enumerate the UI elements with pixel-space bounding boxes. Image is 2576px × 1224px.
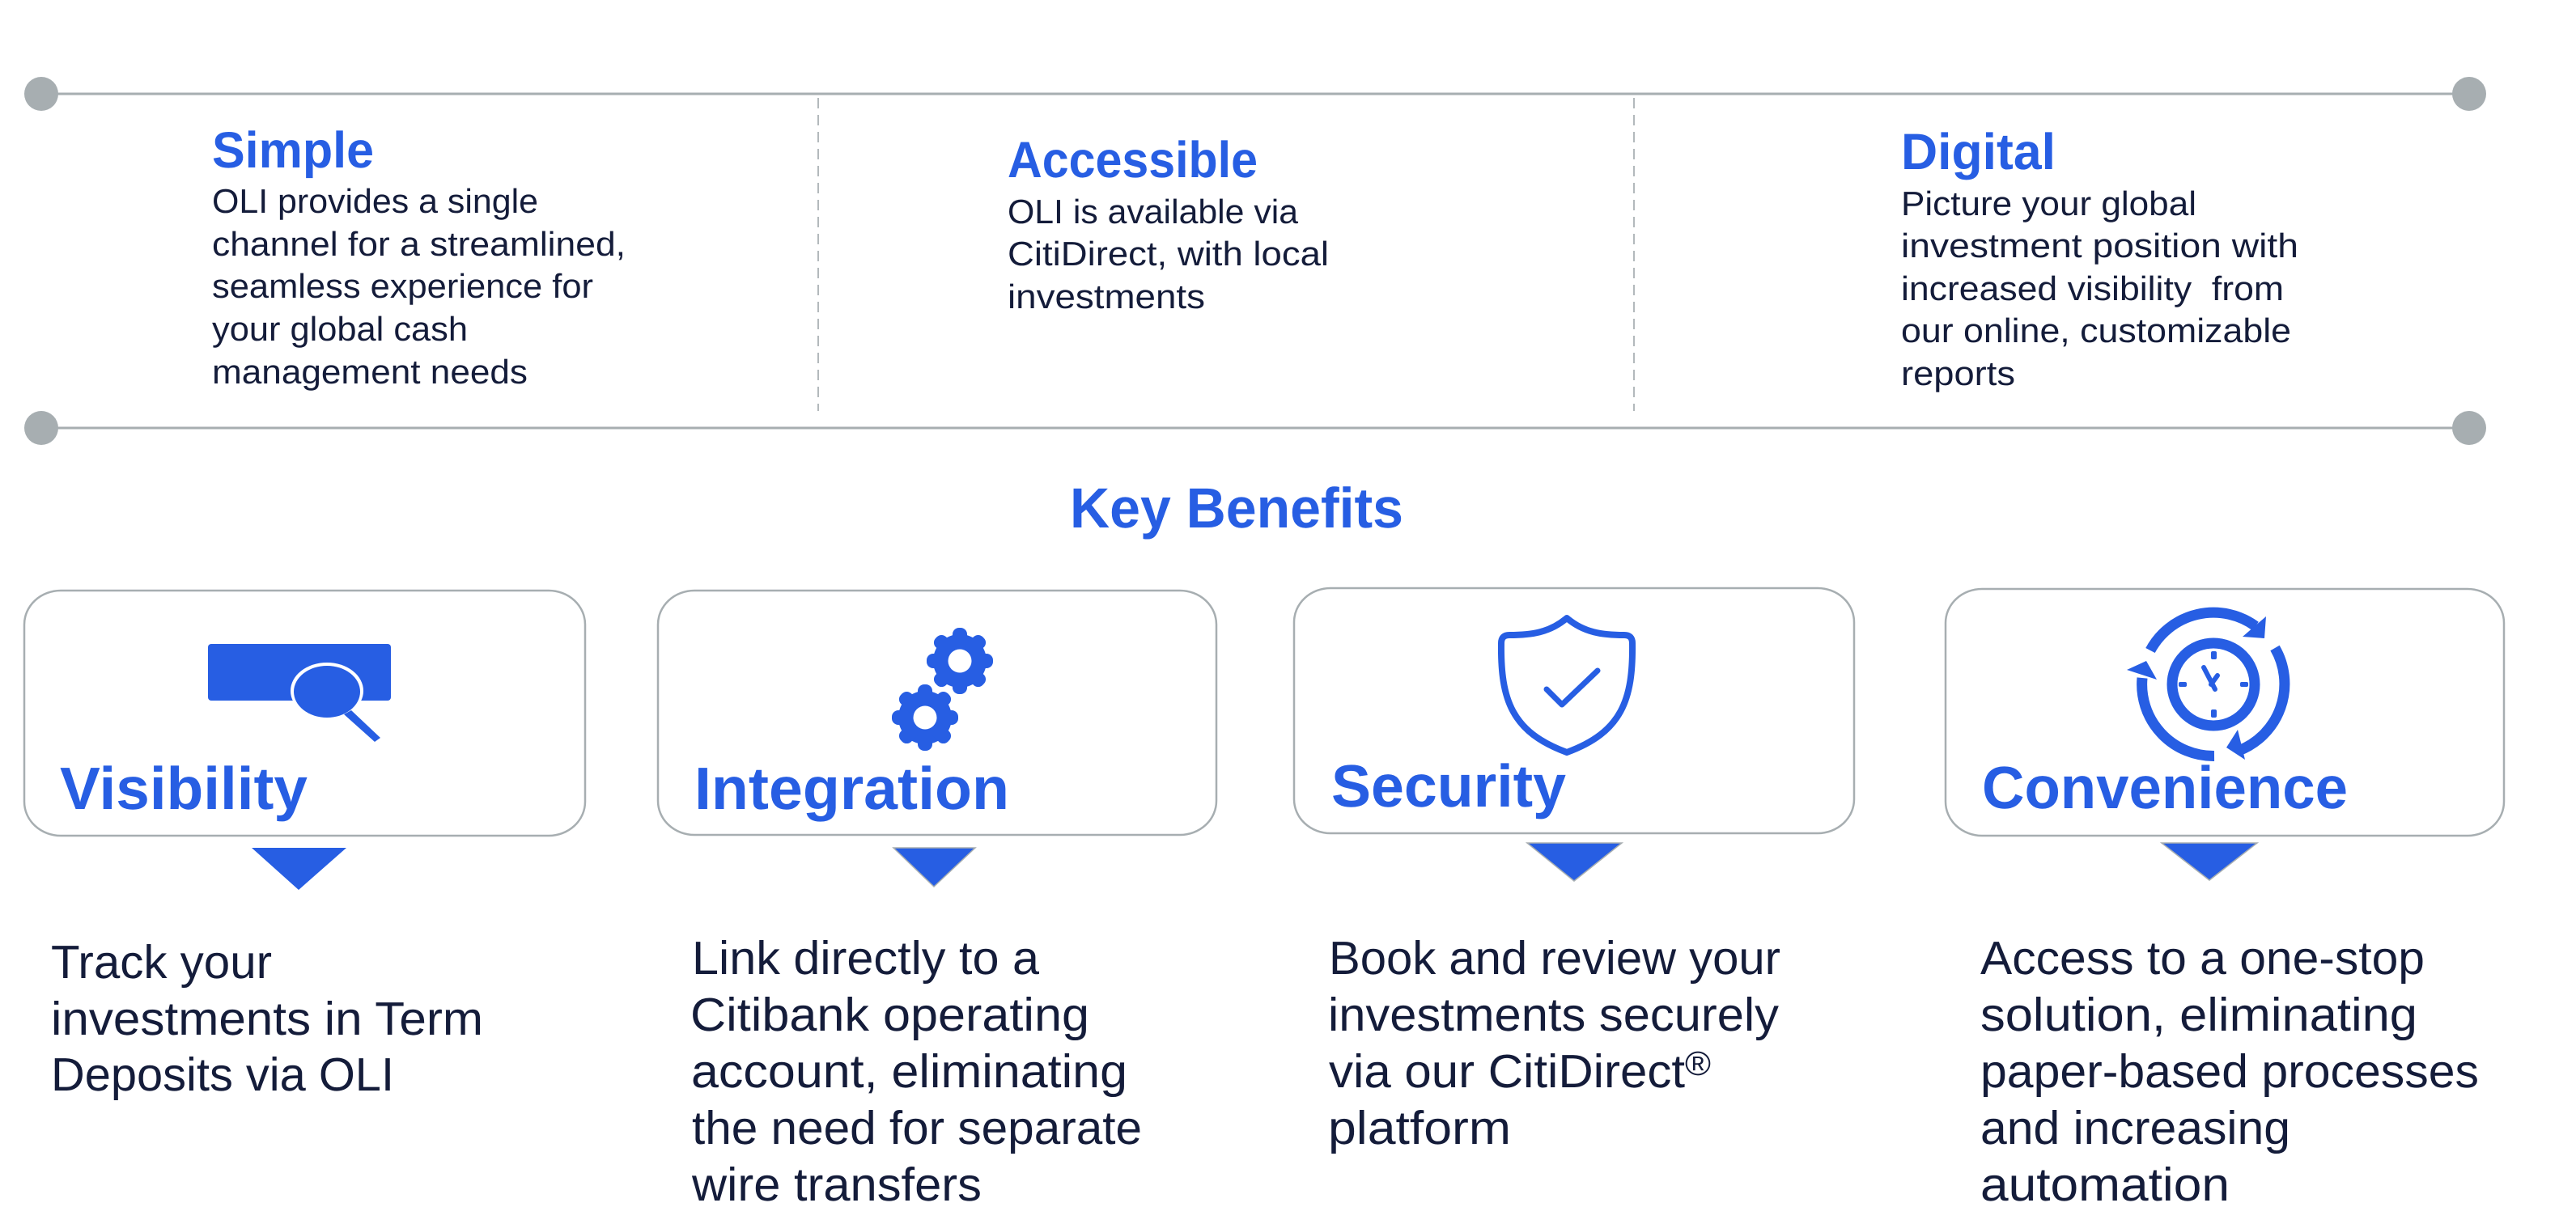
panel: Security xyxy=(1294,588,1854,1154)
panel: Convenience xyxy=(1946,589,2504,1211)
text block: Security description xyxy=(1328,932,1780,1154)
text block: Digital description: investment position with xyxy=(1901,227,2298,265)
heading: Accessible: Accessible xyxy=(1008,132,1258,188)
text block: Security description: platform xyxy=(1328,1102,1511,1154)
top frame: rules and end dots xyxy=(24,77,2486,445)
heading: Convenience: Convenience xyxy=(1982,754,2348,821)
text block: Convenience description: Access to a one-stop xyxy=(1980,932,2425,985)
text block: Convenience description: solution, eliminating xyxy=(1980,989,2417,1041)
text block: Convenience description: paper-based processes xyxy=(1980,1045,2479,1098)
text block: Visibility description: Deposits via OLI xyxy=(51,1048,394,1101)
text block: Visibility description: investments in Term xyxy=(51,993,483,1045)
panel: Integration xyxy=(658,591,1216,1211)
text block: Convenience description: and increasing xyxy=(1980,1102,2290,1154)
text block: Convenience description: automation xyxy=(1980,1158,2230,1211)
text block: Security description: Book and review your xyxy=(1329,932,1780,985)
text block: Simple description: management needs xyxy=(212,353,528,391)
text block: Digital description: our online, customizable xyxy=(1901,311,2291,349)
panel: Accessible xyxy=(1008,132,1329,316)
card outline xyxy=(1294,588,1854,833)
arrow: down triangle xyxy=(1527,843,1622,881)
arrow: down triangle xyxy=(893,848,975,887)
text block: Integration description: wire transfers xyxy=(691,1158,982,1211)
icon: shield with check xyxy=(1501,618,1632,752)
arrow: down triangle xyxy=(2162,843,2257,880)
panel: Simple xyxy=(212,122,626,391)
text block: Simple description: channel for a streamlined, xyxy=(212,225,626,263)
text block: Integration description: account, eliminating xyxy=(691,1045,1127,1098)
text block: Simple description: seamless experience for xyxy=(212,267,593,305)
text block: Accessible description xyxy=(1008,193,1329,316)
text block: Simple description: OLI provides a single xyxy=(212,182,538,220)
text block: Digital description: reports xyxy=(1901,354,2015,392)
text block: Convenience description xyxy=(1980,932,2479,1211)
text block: Security description: via our CitiDirect xyxy=(1329,1045,1673,1098)
icon: clock with circular arrows xyxy=(2127,612,2285,760)
text block: Integration description xyxy=(690,932,1142,1211)
text block: Integration description: Citibank operating xyxy=(690,989,1089,1041)
text block: Visibility description xyxy=(51,936,483,1101)
text block: Accessible description: CitiDirect, with local xyxy=(1008,235,1329,273)
icon: gears xyxy=(892,628,993,751)
text block: Simple description xyxy=(212,182,626,391)
text block: Digital description: increased visibility from xyxy=(1901,269,2284,307)
card outline xyxy=(658,591,1216,835)
text block: Digital description: Picture your global xyxy=(1901,184,2196,222)
heading: Key Benefits: Key Benefits xyxy=(1070,476,1403,540)
card outline xyxy=(1946,589,2504,836)
heading: Integration: Integration xyxy=(694,755,1009,822)
panel: Visibility xyxy=(24,591,585,1101)
card outline xyxy=(24,591,585,836)
heading: Visibility: Visibility xyxy=(60,755,308,822)
text block: Security description: investments securely xyxy=(1328,989,1779,1041)
icon: document with magnifier xyxy=(208,644,391,742)
panel: Digital xyxy=(1901,124,2298,392)
text block: Visibility description: Track your xyxy=(51,936,272,989)
text block: Accessible description: investments xyxy=(1008,277,1205,316)
text block: Integration description: the need for separate xyxy=(692,1102,1142,1154)
text block: Security description: ® xyxy=(1685,1044,1711,1082)
heading: Digital: Digital xyxy=(1901,124,2056,180)
text block: Digital description xyxy=(1901,184,2298,392)
text block: Simple description: your global cash xyxy=(212,310,468,348)
text block: Integration description: Link directly to a xyxy=(692,932,1040,985)
text block: Accessible description: OLI is available via xyxy=(1008,193,1299,231)
heading: Security: Security xyxy=(1331,752,1566,820)
heading: Simple: Simple xyxy=(212,122,374,179)
arrow: down triangle xyxy=(252,848,346,890)
